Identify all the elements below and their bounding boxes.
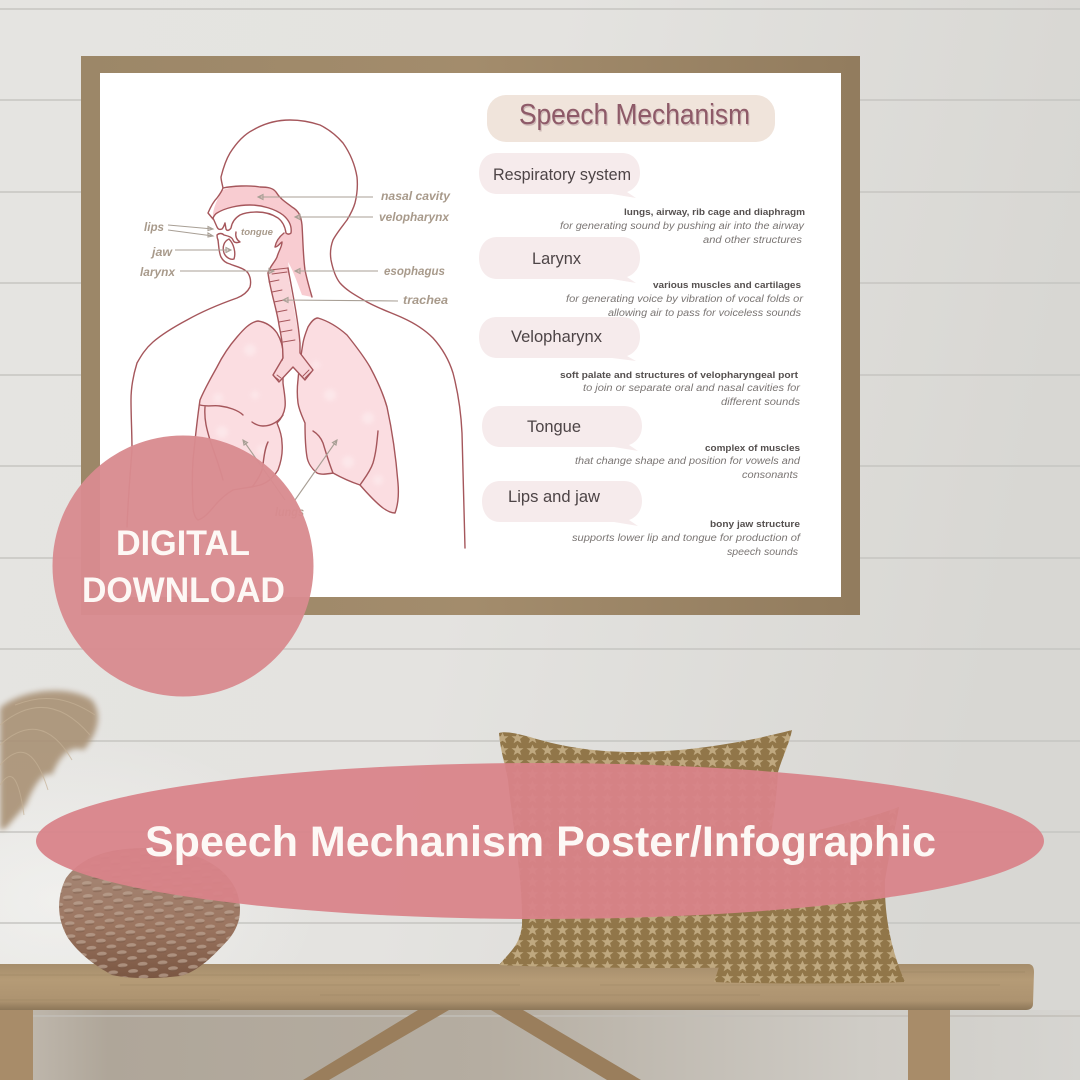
- bench diagonal braces: [303, 1010, 641, 1080]
- section: lips and jaw: Lips and jaw: [508, 487, 601, 506]
- diagram labels: jaw: [150, 247, 173, 259]
- tongue and jaw outline: [217, 232, 240, 243]
- bench legs: [0, 1008, 950, 1080]
- section: tongue: [482, 406, 801, 481]
- section: lips and jaw: bony jaw structure: [710, 519, 800, 530]
- diagram labels: velopharynx: [379, 212, 450, 224]
- bottom title banner: [36, 763, 1044, 919]
- section: velopharynx: Velopharynx: [511, 327, 602, 346]
- large star pillow: [499, 730, 792, 968]
- trachea and bronchi: [268, 268, 313, 382]
- section: velopharynx: to join or separate oral and nasal cavities for: [583, 383, 801, 394]
- diagram labels: nasal cavity: [381, 191, 451, 203]
- section: respiratory system: lungs, airway, rib cage and diaphragm: [624, 207, 805, 218]
- bottom title banner: Speech Mechanism Poster/Infographic: [145, 818, 936, 866]
- pampas grass plume: [0, 691, 98, 830]
- vase: [59, 848, 240, 978]
- diagram labels: esophagus: [384, 266, 445, 278]
- section: respiratory system: Respiratory system: [493, 165, 631, 184]
- left lung: [192, 321, 285, 520]
- section: tongue: that change shape and position for vowels and: [575, 456, 801, 467]
- pointer arrows: [168, 194, 398, 500]
- diagram labels: lips: [144, 222, 164, 234]
- title pill: Speech Mechanism: [520, 100, 751, 132]
- section: lips and jaw: supports lower lip and tongue for production of: [572, 533, 801, 544]
- bench top: [0, 964, 1034, 1010]
- section: lips and jaw: speech sounds: [727, 547, 798, 558]
- section: lips and jaw: [482, 481, 801, 558]
- nasal cavity and palate lines: [223, 186, 312, 297]
- right lung: [297, 318, 398, 513]
- section: tongue: consonants: [742, 470, 798, 481]
- section: tongue: Tongue: [527, 417, 581, 436]
- section: larynx: [479, 237, 804, 319]
- section: respiratory system: [479, 153, 805, 246]
- small star pillow: [714, 807, 905, 984]
- digital download badge: DOWNLOAD: [82, 571, 285, 610]
- bench: [0, 964, 1034, 1080]
- section: larynx: for generating voice by vibration of vocal folds or: [566, 294, 804, 305]
- diagram labels: lungs: [275, 507, 304, 519]
- section: velopharynx: different sounds: [721, 397, 800, 408]
- section: respiratory system: and other structures: [703, 235, 802, 246]
- airway pink fill: [213, 186, 312, 297]
- head and torso outline: [208, 120, 465, 548]
- framed poster: [81, 56, 860, 615]
- section: larynx: Larynx: [532, 249, 581, 268]
- title pill: [487, 95, 775, 142]
- section: velopharynx: soft palate and structures of velopharyngeal port: [560, 370, 799, 381]
- section: larynx: various muscles and cartilages: [653, 280, 801, 291]
- diagram labels: larynx: [140, 267, 176, 279]
- poster paper: [100, 73, 841, 597]
- diagram labels: [140, 191, 451, 519]
- diagram labels: tongue: [241, 227, 274, 238]
- section: velopharynx: [479, 317, 801, 408]
- section: larynx: allowing air to pass for voiceless sounds: [608, 308, 801, 319]
- diagram labels: trachea: [403, 295, 449, 307]
- anatomy diagram: [127, 120, 465, 548]
- section: respiratory system: for generating sound by pushing air into the airway: [560, 221, 805, 232]
- section: tongue: complex of muscles: [705, 443, 800, 454]
- title pill: Speech Mechanism: [519, 99, 750, 131]
- digital download badge: [52, 436, 314, 696]
- wooden frame: [81, 56, 860, 615]
- digital download badge: DIGITAL: [116, 524, 250, 563]
